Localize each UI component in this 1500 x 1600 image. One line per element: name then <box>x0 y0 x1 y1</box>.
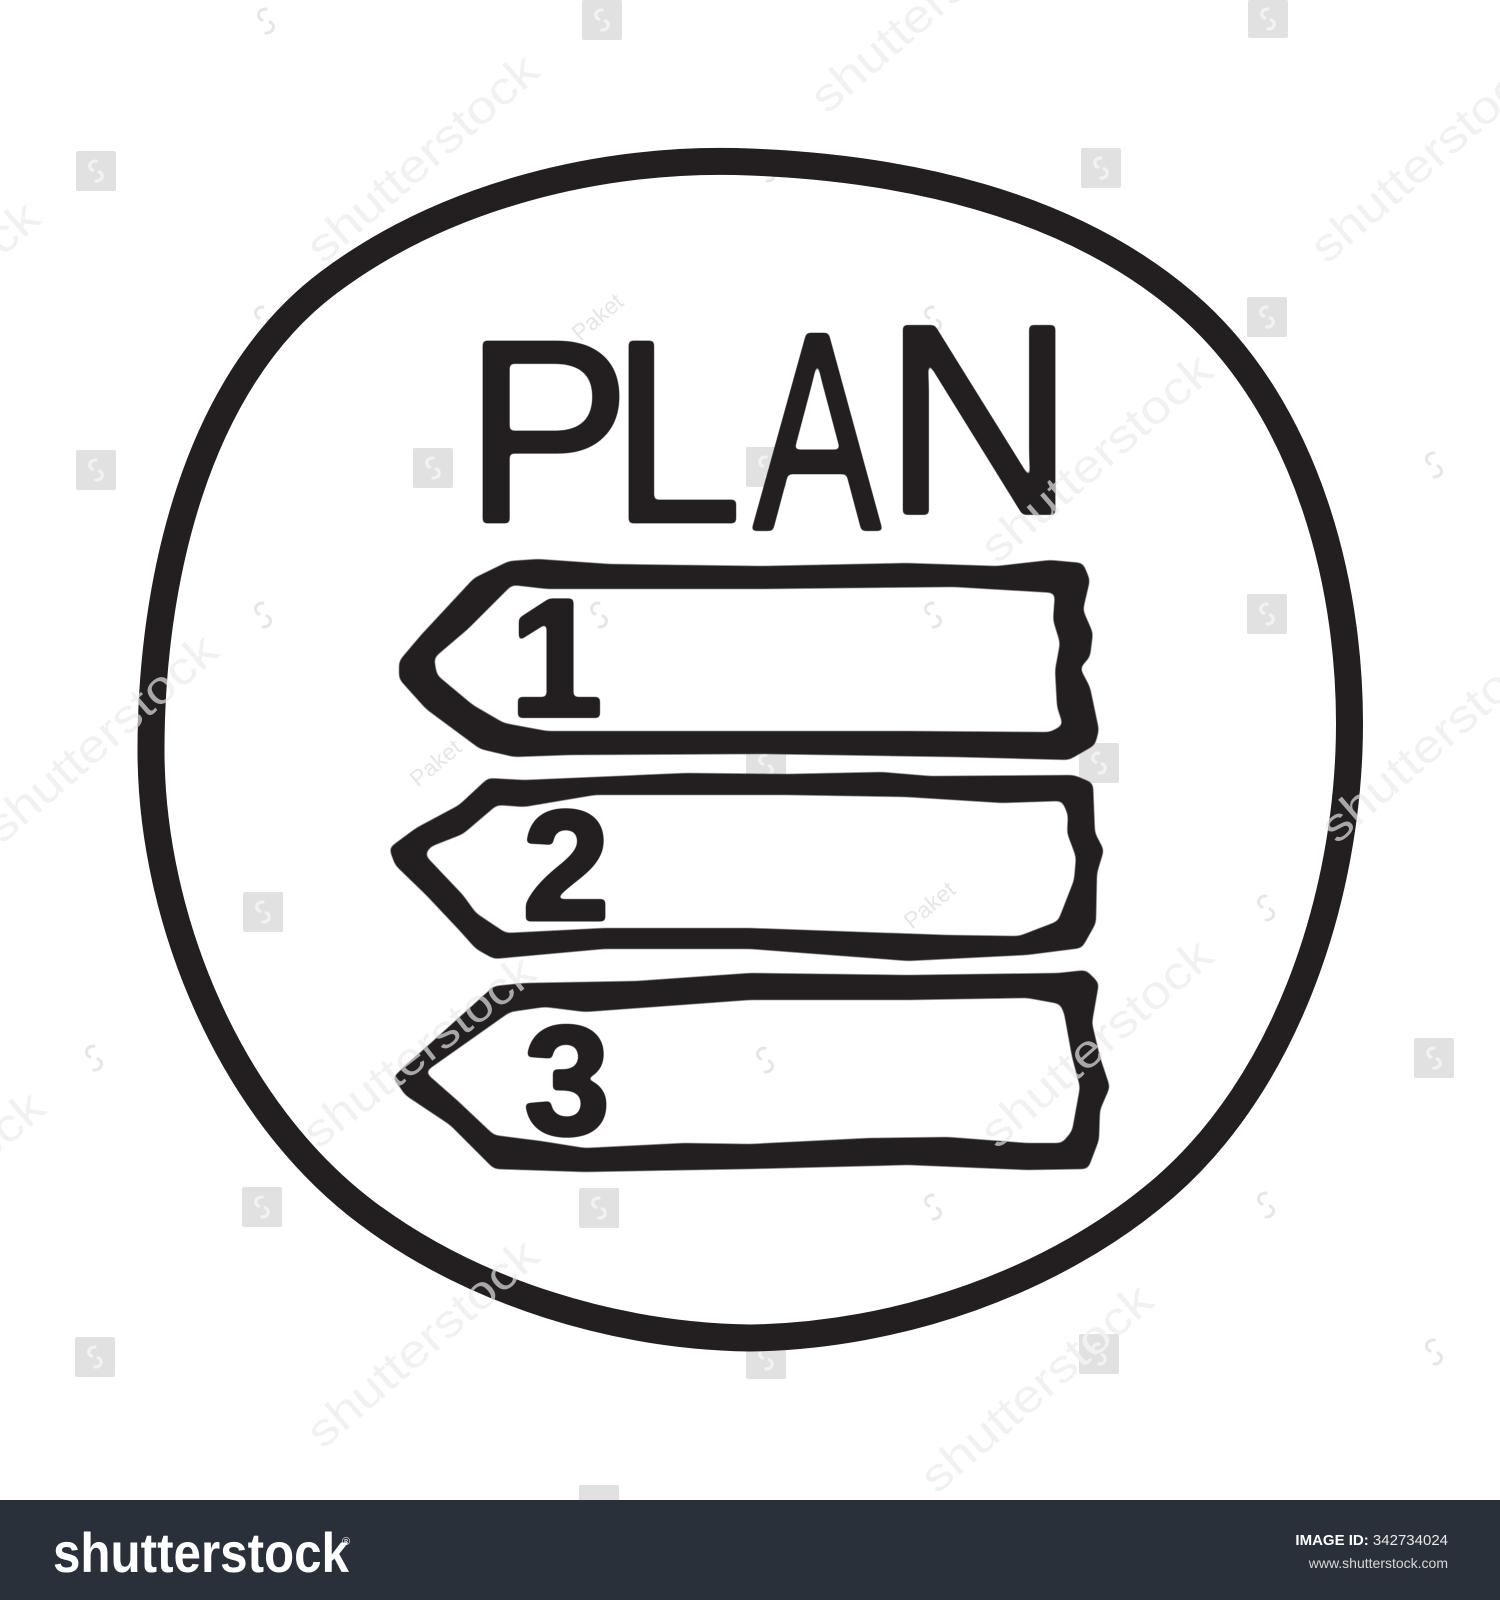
arrow 3 outline <box>393 970 1110 1172</box>
watermark over ink: shutterstock <box>292 944 546 1158</box>
image id: IMAGE ID: 342734024 <box>1295 1532 1448 1549</box>
watermark text: shutterstock <box>292 944 546 1158</box>
watermark small marks <box>87 9 1441 1364</box>
watermark over ink: shutterstock <box>295 1227 549 1458</box>
arrow 3 <box>393 970 1110 1172</box>
watermark tile marks <box>89 9 1440 1369</box>
watermark text: shutterstock <box>295 1227 549 1458</box>
footer logo: ® <box>342 1536 350 1548</box>
watermark text: shutterstock <box>909 1272 1163 1503</box>
number 1: 1 <box>509 564 603 752</box>
icon: hand-drawn round frame <box>151 161 1349 1338</box>
arrow 1 <box>399 559 1099 760</box>
watermark text: Paket <box>567 288 629 346</box>
number 3: 3 <box>524 994 610 1167</box>
watermark over ink: shutterstock <box>295 42 549 273</box>
watermark over ink: shutterstock <box>969 927 1223 1158</box>
arrow 2 <box>389 772 1104 961</box>
watermark text: shutterstock <box>969 927 1223 1158</box>
watermark text: shutterstock <box>969 342 1223 573</box>
watermark text: Paket <box>405 734 467 792</box>
title: PLAN <box>470 320 1070 545</box>
website: www.shutterstock.com <box>1308 1555 1448 1571</box>
footer band <box>0 1500 1500 1600</box>
watermark over ink: shutterstock <box>969 342 1223 573</box>
number 2: 2 <box>523 779 609 952</box>
footer logo: shutterstock <box>53 1521 350 1584</box>
watermark text: Paket <box>899 876 961 934</box>
watermark text: shutterstock <box>295 42 549 273</box>
arrow 1 outline <box>399 559 1099 760</box>
arrow 2 outline <box>389 772 1104 961</box>
